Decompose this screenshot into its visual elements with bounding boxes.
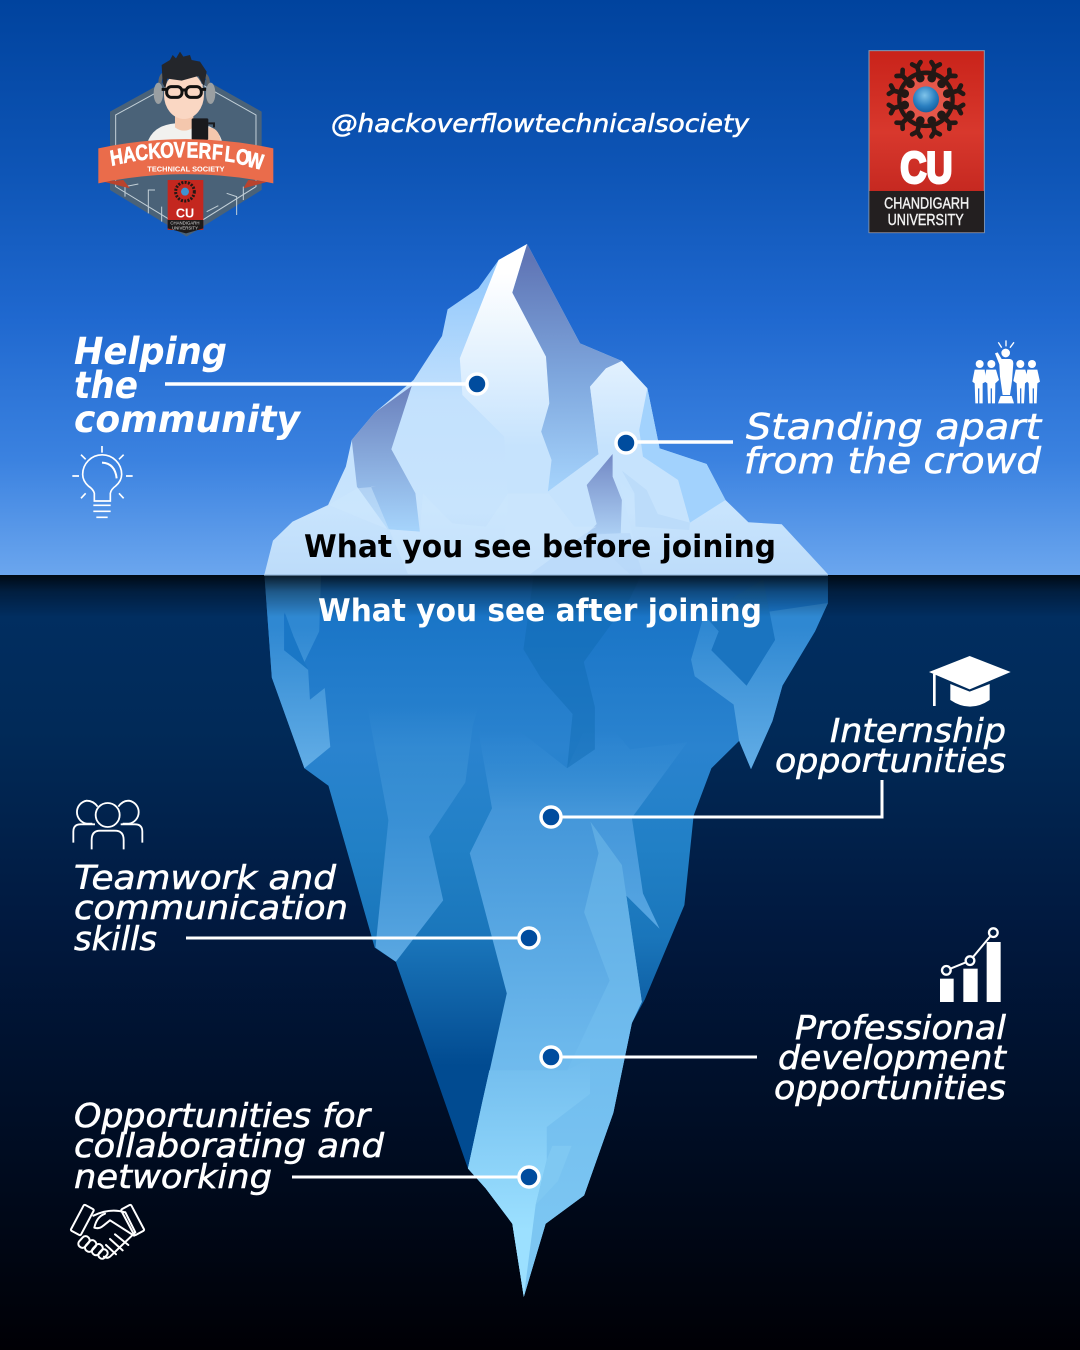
callout: standing apart: from the crowd	[744, 441, 1042, 482]
callout: collaborating and networking	[74, 1096, 539, 1196]
background: sky	[0, 0, 1080, 575]
university name: CHANDIGARH	[884, 196, 969, 213]
heading: before joining: What you see before joining	[304, 529, 776, 565]
ribbon subtitle: TECHNICAL SOCIETY	[147, 166, 225, 173]
callout: standing apart	[616, 407, 1043, 482]
CU letters: CU	[900, 143, 952, 192]
callout: professional development: Professional	[795, 1008, 1006, 1047]
callout: teamwork: skills	[74, 919, 157, 958]
mini CU badge: UNIVERSITY	[172, 225, 198, 230]
callout: teamwork	[74, 858, 539, 958]
logo: Hackoverflow technical society	[98, 52, 273, 237]
mini CU badge: CU	[176, 207, 194, 221]
mini CU badge: CHANDIGARH	[170, 220, 200, 225]
callout: professional development: opportunities	[774, 1068, 1006, 1107]
waterline shadow	[0, 575, 1080, 617]
callout: internship opportunities	[541, 711, 1006, 827]
ribbon	[98, 139, 273, 183]
iceberg below water	[264, 575, 828, 1297]
mini CU badge	[168, 180, 203, 233]
icon: growth chart	[940, 928, 1001, 1002]
callout: collaborating and networking: networking	[74, 1157, 272, 1196]
callout: helping the community: Helping	[74, 330, 227, 373]
callout: teamwork: communication	[74, 888, 348, 927]
gear of figures	[889, 62, 963, 137]
heading: after joining: What you see after joining	[318, 593, 762, 629]
callout: professional development: development	[778, 1038, 1007, 1077]
handle text: @hackoverflowtechnicalsociety	[331, 109, 750, 138]
callout: internship opportunities: Internship	[830, 711, 1006, 750]
callout: internship opportunities: opportunities	[775, 741, 1006, 780]
callout: helping the community: community	[74, 398, 302, 441]
callout: helping the community	[74, 330, 487, 441]
callout: standing apart: Standing apart	[746, 407, 1043, 448]
icon: handshake	[70, 1204, 145, 1260]
callout: teamwork: Teamwork and	[74, 858, 337, 897]
icon: team	[73, 801, 142, 849]
character	[148, 52, 222, 147]
iceberg above water	[264, 244, 828, 574]
logo: Chandigarh University	[869, 51, 984, 233]
callout: professional development	[541, 1008, 1007, 1107]
callout: helping the community: the	[74, 364, 138, 407]
icon: light bulb	[72, 446, 133, 517]
ribbon tails	[103, 180, 130, 188]
background: deep sea	[0, 575, 1080, 1350]
logo: Chandigarh University: UNIVERSITY	[888, 212, 964, 229]
icon: graduation cap	[929, 656, 1011, 707]
icon: leader in crowd	[972, 340, 1040, 403]
ribbon title: HACKOVERFLOW	[109, 138, 265, 175]
callout: collaborating and networking: Opportunities for	[74, 1096, 373, 1135]
callout: collaborating and networking: collaborating and	[74, 1126, 385, 1165]
hexagon badge	[110, 69, 262, 237]
